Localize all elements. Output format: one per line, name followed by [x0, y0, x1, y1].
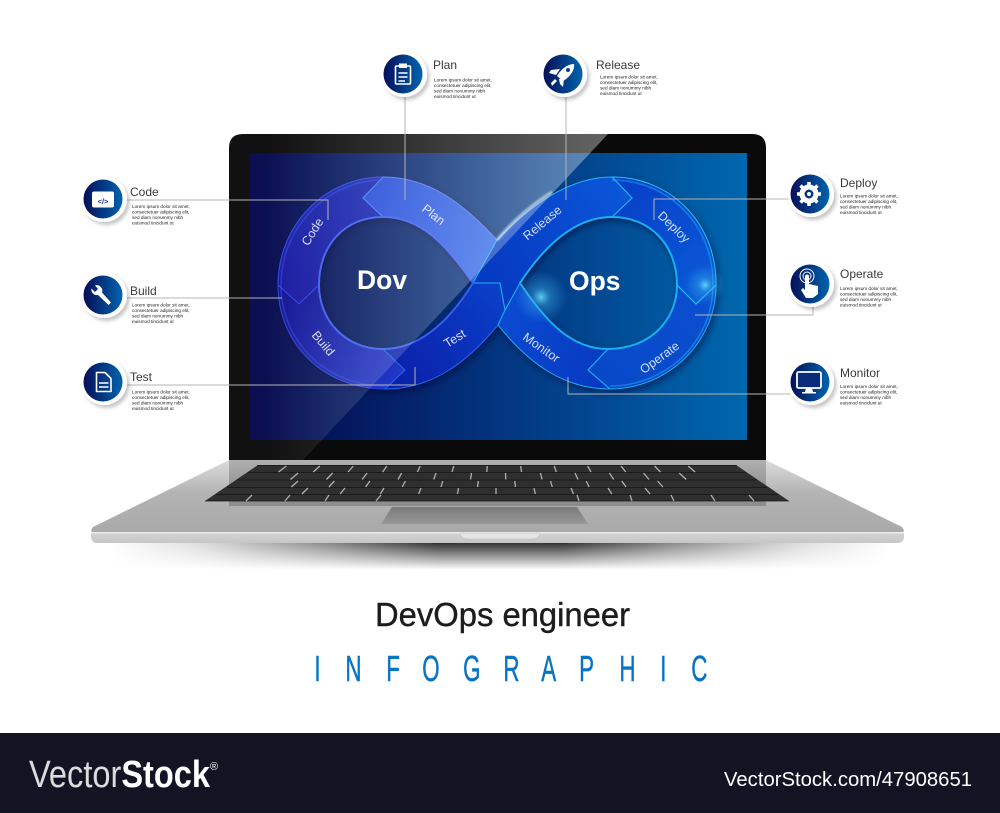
footer id: VectorStock.com/47908651 [724, 768, 972, 791]
registered mark: ® [210, 761, 218, 773]
text: Build body: euismod tincidunt ut [132, 319, 174, 324]
footer band [0, 733, 1000, 813]
Ops text: Ops [569, 266, 621, 296]
right loop outer rim [610, 180, 713, 386]
label: Operate: Operate [637, 339, 682, 377]
heading: Monitor: Monitor [840, 366, 880, 380]
text: Build body: consectetuer adipiscing elit, [132, 308, 190, 313]
keyboard [205, 465, 789, 501]
Dov text: Dov [357, 265, 407, 295]
text: Release body: consectetuer adipiscing elit, [600, 80, 658, 85]
text: Monitor body: Lorem ipsum dolor sit amet, [840, 384, 898, 389]
laptop base deck [91, 460, 904, 532]
segment: Deploy [612, 177, 716, 304]
callout: Test [81, 359, 190, 411]
trackpad [381, 507, 588, 524]
segment: Code [278, 177, 383, 304]
infinity diagram [278, 177, 725, 389]
laptop shadow [110, 543, 890, 571]
deck screen reflection [229, 460, 766, 506]
text: Operate body: consectetuer adipiscing elit, [840, 292, 898, 296]
callout: Operate [788, 261, 898, 308]
glass reflection [229, 134, 608, 460]
label: Monitor: Monitor [520, 330, 562, 365]
subtitle: INFOGRAPHIC [314, 650, 707, 689]
segment: Test [383, 283, 505, 389]
icon: rocket [541, 51, 587, 97]
text: Operate body: sed diam nonummy nibh [840, 297, 891, 302]
glow: Monitor [515, 271, 567, 323]
heading: Test: Test [130, 370, 153, 384]
callout: Deploy [788, 171, 898, 217]
text: Deploy body: consectetuer adipiscing elit, [840, 199, 898, 204]
label: Test: Test [441, 326, 469, 351]
label: Build: Build [309, 328, 337, 359]
callout: Build [81, 272, 190, 324]
icon: wrench [81, 272, 127, 318]
right loop inner rim [520, 217, 677, 349]
callout: Plan [381, 51, 492, 99]
footer logo: VectorStock [29, 754, 211, 796]
text: Code body: consectetuer adipiscing elit, [132, 210, 190, 214]
screen lid [229, 134, 766, 460]
screen [249, 153, 747, 440]
heading: Plan: Plan [433, 58, 457, 72]
text: Release body: euismod tincidunt ut [600, 91, 642, 96]
text: Monitor body: sed diam nonummy nibh [840, 395, 891, 400]
heading: Code: Code [130, 185, 159, 199]
left loop outer rim [281, 180, 385, 386]
text: Operate body: euismod tincidunt ut [840, 302, 882, 308]
heading: Build: Build [130, 284, 157, 298]
segment: Plan [363, 177, 497, 283]
text: Plan body: Lorem ipsum dolor sit amet, [434, 78, 492, 82]
heading: Operate: Operate [840, 267, 884, 281]
text: Operate body: Lorem ipsum dolor sit amet, [840, 286, 898, 291]
callout: Code [81, 176, 190, 226]
segment: Release [473, 177, 632, 310]
label: Plan: Plan [419, 202, 448, 228]
text: Test body: euismod tincidunt ut [132, 406, 174, 411]
text: Monitor body: euismod tincidunt ut [840, 400, 882, 406]
text: Plan body: euismod tincidunt ut [434, 94, 476, 99]
segment: Operate [588, 285, 716, 389]
text: Plan body: sed diam nonummy nibh [434, 88, 485, 94]
laptop [91, 134, 904, 571]
icon: document [81, 359, 127, 405]
glow: Deploy [685, 265, 725, 305]
text: Release body: sed diam nonummy nibh [600, 86, 651, 90]
text: Code body: Lorem ipsum dolor sit amet, [132, 204, 190, 209]
icon: monitor [788, 359, 834, 405]
segment: Build [278, 285, 405, 389]
callout: Release [541, 51, 658, 97]
title: DevOps engineer [375, 596, 630, 633]
text: Code body: sed diam nonummy nibh [132, 215, 183, 220]
text: Test body: consectetuer adipiscing elit, [132, 395, 190, 400]
label: Release: Release [520, 203, 565, 243]
ring shadow [278, 177, 716, 389]
text: Release body: Lorem ipsum dolor sit amet, [600, 74, 658, 80]
front notch [460, 533, 540, 539]
connector lines [125, 97, 813, 394]
text: Monitor body: consectetuer adipiscing elit, [840, 390, 898, 394]
icon: code window: </> [98, 197, 109, 206]
text: Test body: Lorem ipsum dolor sit amet, [132, 390, 190, 394]
icon: clipboard [381, 51, 427, 97]
text: Plan body: consectetuer adipiscing elit, [434, 83, 492, 88]
callout: Monitor [788, 359, 898, 406]
text: Deploy body: Lorem ipsum dolor sit amet, [840, 194, 898, 198]
text: Code body: euismod tincidunt ut [132, 220, 174, 226]
heading: Deploy: Deploy [840, 176, 877, 190]
label: Code: Code [299, 215, 326, 248]
left loop inner rim [319, 217, 473, 349]
label: Deploy: Deploy [655, 209, 693, 246]
heading: Release: Release [596, 58, 640, 72]
icon: touch hand [788, 261, 834, 307]
text: Build body: sed diam nonummy nibh [132, 314, 183, 318]
text: Test body: sed diam nonummy nibh [132, 400, 183, 406]
segment: Monitor [498, 283, 610, 389]
text: Deploy body: sed diam nonummy nibh [840, 204, 891, 210]
text: Deploy body: euismod tincidunt ut [840, 210, 882, 215]
crossing highlight [497, 192, 552, 240]
icon: gear [788, 171, 834, 217]
front edge [91, 532, 904, 543]
text: Build body: Lorem ipsum dolor sit amet, [132, 302, 190, 308]
